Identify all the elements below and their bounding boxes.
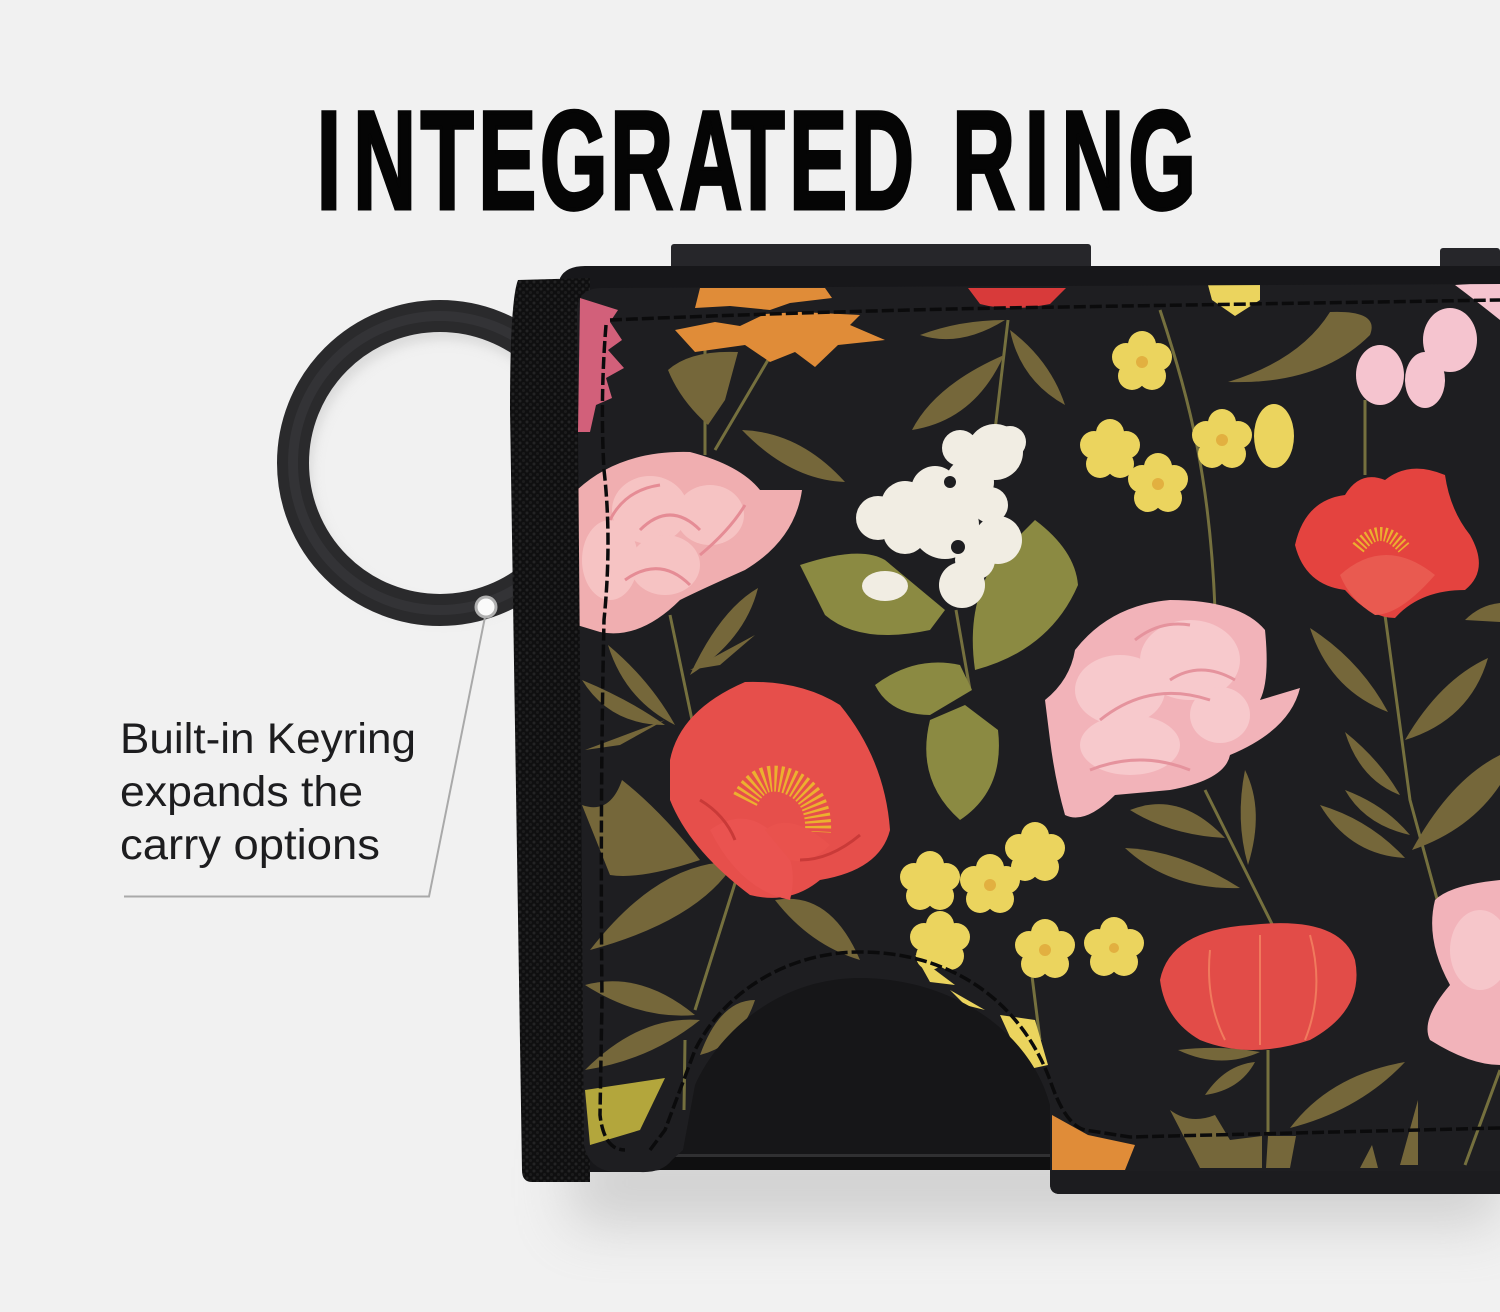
elastic band bbox=[510, 278, 590, 1182]
product: floral wallet with keyring bbox=[293, 244, 1500, 1225]
notch floor bbox=[660, 960, 1060, 1170]
pink flower edge bbox=[578, 298, 624, 432]
big coral flower bbox=[670, 682, 890, 900]
title: INTEGRATED RING bbox=[317, 82, 1196, 239]
right coral peony bbox=[1295, 469, 1479, 618]
yellow blossoms bbox=[900, 285, 1294, 1070]
icon: metal key ring bbox=[293, 316, 587, 612]
stitching bbox=[600, 300, 1500, 1150]
stems bbox=[670, 310, 1500, 1165]
green leaves bbox=[585, 520, 1078, 1145]
white blossom cluster bbox=[856, 424, 1026, 608]
wallet back plate bbox=[560, 266, 1500, 1194]
callout: keyring bbox=[120, 597, 496, 896]
light pink blossoms top-right bbox=[1356, 282, 1500, 408]
olive leaves bbox=[582, 312, 1500, 1168]
callout text: Built-in Keyring bbox=[120, 715, 416, 763]
leather bottom band bbox=[1050, 1184, 1060, 1194]
callout leader line bbox=[124, 607, 487, 896]
callout text: carry options bbox=[120, 821, 380, 869]
floral leather panel bbox=[560, 270, 1500, 1200]
coral flower at top bbox=[968, 288, 1066, 308]
wallet shadow bbox=[570, 1140, 1500, 1225]
big pink peony left bbox=[577, 452, 802, 633]
right pink peony bottom bbox=[1428, 880, 1500, 1065]
callout anchor dot bbox=[476, 597, 496, 617]
top metal clips bbox=[671, 244, 1500, 274]
bottom coral flower bbox=[1160, 923, 1357, 1050]
orange flower top bbox=[675, 288, 1135, 1170]
central pink peony bbox=[1045, 600, 1300, 818]
callout text: expands the bbox=[120, 768, 363, 816]
